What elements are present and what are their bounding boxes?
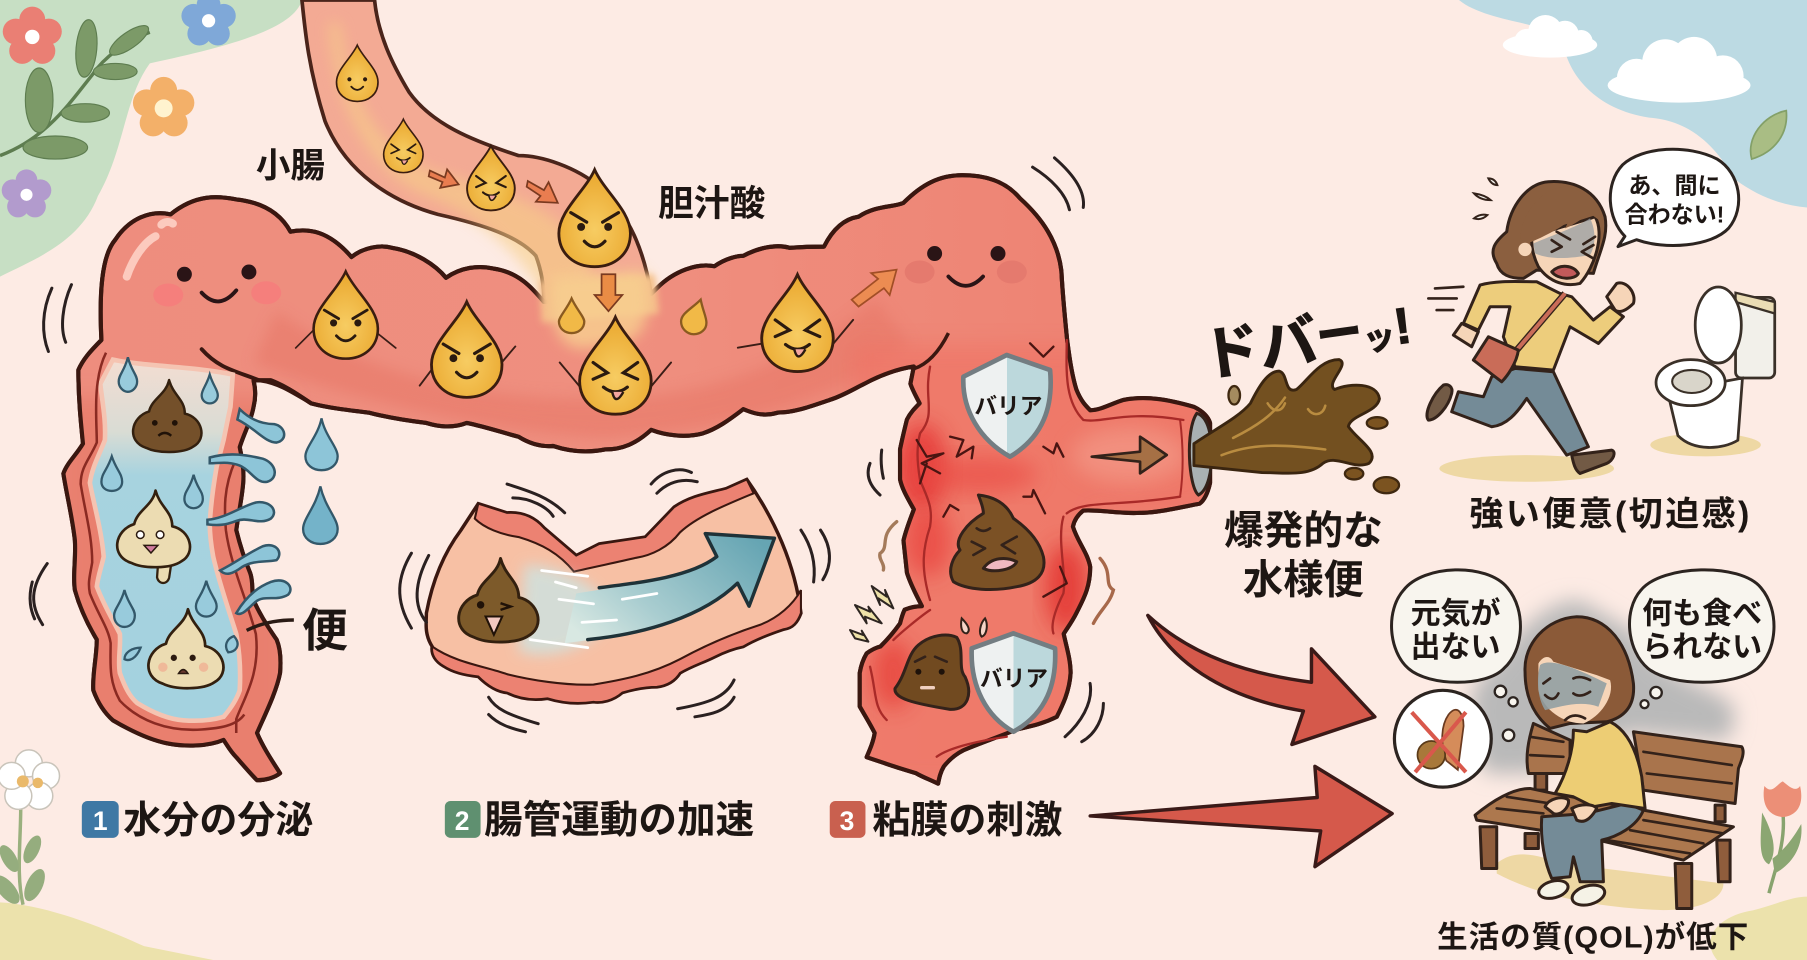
bile drop 2: [384, 119, 423, 173]
step label 2: 2: [455, 806, 469, 836]
bile drop 7 with arms: [560, 317, 671, 414]
back fist: [1453, 323, 1478, 347]
decoration: purple flower: [2, 169, 51, 217]
shield upper: [963, 355, 1051, 457]
bench back left: [1527, 723, 1570, 773]
motion lines: [1428, 287, 1463, 310]
water drop outside large: [305, 418, 338, 470]
fringe: [1537, 618, 1630, 680]
sweat: [1474, 178, 1497, 219]
colon highlight: [127, 222, 173, 277]
step label 1: 1: [93, 806, 108, 836]
lining line left: [81, 353, 244, 730]
bag strap: [1517, 293, 1565, 350]
thought bubble: no energy: 出ない: [1411, 631, 1500, 664]
ground shadow: [1439, 455, 1614, 482]
front legs: [1480, 827, 1730, 908]
water drop outside larger: [303, 486, 338, 544]
bile drop 8 with arms: [738, 275, 853, 372]
leader line for stool: [247, 620, 294, 630]
causal arrow lower: [1090, 766, 1392, 867]
background: yellow hill right: [1710, 897, 1807, 960]
inner fold on right: [914, 333, 948, 369]
decoration: white flower with stem: [0, 750, 60, 908]
bile drop 4: [559, 170, 630, 267]
speed lines: [530, 570, 657, 648]
speed wash: [519, 565, 611, 655]
segment top lining: [475, 479, 754, 572]
decoration: tulip: [1761, 781, 1802, 893]
bile drop 3: [467, 146, 515, 210]
onomatopoeia: !: [1390, 296, 1415, 355]
decoration: blue flower: [181, 0, 236, 46]
shield lower: [972, 633, 1055, 732]
bile drop 1: [337, 45, 378, 101]
stool: worried lower: [895, 635, 969, 709]
jeans: [1541, 803, 1643, 882]
face: [1532, 217, 1599, 285]
sitting woman on bench: [1475, 617, 1743, 910]
panel 1: water lumen: [81, 353, 257, 733]
lining line right: [225, 461, 257, 733]
decoration: red flower: [3, 7, 62, 64]
legs: [1452, 368, 1588, 455]
colon shading and inflamed patches: [58, 300, 1216, 795]
decoration: orange flower: [133, 77, 194, 136]
speech bubble: too late: 合わない!: [1625, 201, 1724, 227]
bench back right: [1633, 732, 1743, 803]
stool: winking in motion: [459, 558, 538, 642]
junction patch: [539, 274, 659, 323]
fringe: [1520, 187, 1603, 242]
tube mouth: [1189, 413, 1212, 495]
bile drop 5 with arms: [296, 271, 396, 359]
flow arrow 1: [429, 169, 459, 188]
water drops in lumen: [101, 357, 238, 660]
caption: explosive watery stool: 水様便: [1243, 557, 1364, 603]
bile drop 6 with arms: [420, 302, 515, 397]
barrier label lower: バリア: [980, 666, 1048, 692]
small bile droplet left: [559, 298, 584, 333]
large intestine body: [58, 175, 1216, 795]
causal arrow upper: [1148, 615, 1375, 744]
front shoe: [1572, 450, 1614, 473]
flow arrow 4: [852, 270, 897, 307]
thought dots: [1495, 686, 1662, 741]
eyes and brows: [1552, 232, 1595, 258]
face shade: [1538, 663, 1607, 710]
right colon smile face: [905, 246, 1027, 286]
background: green corner wash: [0, 0, 302, 277]
speech bubble: too late: [1610, 149, 1739, 247]
speech bubble: too late: あ、間に: [1628, 173, 1721, 199]
stool: pained large: [951, 495, 1044, 590]
ear: [1518, 243, 1532, 256]
lightning sparks: [850, 586, 893, 642]
step label 3: 3: [840, 806, 854, 836]
motion marks lower-left: [30, 564, 47, 625]
face: [1538, 657, 1611, 723]
motion marks near column: [868, 450, 1103, 742]
step label 2: 腸管運動の加速: [484, 799, 754, 842]
background: yellow hill left: [0, 902, 213, 960]
onomatopoeia: ッ: [1361, 318, 1398, 358]
thought bubble: no energy: [1392, 570, 1520, 682]
step label 3: 粘膜の刺激: [872, 800, 1062, 842]
face shade: [1533, 218, 1594, 258]
junction highlight: [550, 271, 648, 349]
motion marks right of colon: [1033, 158, 1084, 210]
lining lines: [870, 340, 1183, 757]
stool: beige worried: [148, 609, 223, 688]
teal arrow: [565, 534, 774, 643]
panel 2: bowel motility segment: [426, 479, 801, 703]
gloomy cloud: [1472, 600, 1734, 773]
onomatopoeia: ドバ: [1198, 309, 1321, 389]
thought bubble: can't eat: 何も食べ: [1642, 597, 1762, 630]
left colon smile face: [153, 264, 281, 307]
flow arrow 3: [595, 274, 622, 311]
running woman: [1427, 178, 1634, 482]
hair back: [1493, 182, 1606, 278]
bile flow tint: [328, 23, 605, 346]
front fist: [1607, 283, 1634, 311]
slats: [1530, 737, 1732, 783]
decoration: cloud small: [1503, 15, 1597, 58]
onomatopoeia: ー: [1313, 305, 1366, 363]
water squirts: [207, 409, 290, 614]
seat slats: [1497, 797, 1723, 853]
top fold line: [202, 349, 311, 403]
thought bubble: can't eat: [1629, 570, 1774, 682]
bag strap fill: [1517, 293, 1565, 350]
cracks: [917, 343, 1067, 597]
watery stool splash: [1194, 360, 1379, 473]
caption: explosive watery stool: [1224, 509, 1383, 603]
flow arrow in tube: [1092, 437, 1167, 473]
hands: [1545, 798, 1597, 821]
wavy irritation left: [880, 522, 897, 570]
mouth: [1552, 266, 1578, 278]
thought bubble: can't eat: られない: [1642, 631, 1762, 664]
torso: [1555, 722, 1645, 808]
hair: [1525, 617, 1634, 728]
toilet: [1650, 287, 1775, 456]
label: bile acid: 胆汁酸: [658, 184, 765, 224]
back shoe: [1427, 385, 1452, 420]
wavy irritation right: [1093, 558, 1113, 623]
decoration: branch with leaves: [0, 19, 153, 159]
thought bubble: no energy: 元気が: [1411, 596, 1500, 630]
barrier label upper: バリア: [974, 393, 1042, 419]
background: blue sky wash: [1459, 0, 1807, 207]
motion marks upper-left: [44, 285, 71, 352]
ground shadow: [1497, 854, 1723, 910]
motion marks around segment: [400, 470, 829, 732]
torso with arms: [1463, 281, 1623, 370]
caption: QOL decline: 生活の質(QOL)が低下: [1437, 919, 1748, 954]
segment bottom lining: [432, 590, 801, 703]
stool: dark: [133, 380, 201, 452]
bench seat: [1475, 788, 1733, 860]
small intestine tube: [302, 0, 651, 346]
stool: beige smiling: [117, 491, 190, 583]
eyes, brows and mouth: [1543, 677, 1590, 720]
food crossed out bubble: [1394, 690, 1491, 787]
tube inner lining: [1180, 420, 1183, 497]
sweat over lower stool: [961, 618, 987, 637]
small bile droplet right: [681, 300, 706, 334]
label: stool: 便: [302, 605, 348, 657]
caption: explosive watery stool: 爆発的な: [1224, 509, 1383, 553]
shoulder bag: [1473, 337, 1518, 382]
rear bench legs: [1525, 773, 1725, 848]
flow arrow 2: [527, 181, 558, 203]
decoration: cloud large: [1608, 37, 1751, 103]
panel 3: inflamed mucosa details: [850, 340, 1212, 757]
splash droplets: [1228, 386, 1399, 493]
decoration: leaf: [1751, 111, 1787, 159]
caption: strong urgency: 強い便意(切迫感): [1469, 496, 1749, 534]
step label 1: 水分の分泌: [123, 800, 313, 842]
shoes: [1537, 878, 1607, 908]
label: small intestine: 小腸: [256, 147, 325, 185]
